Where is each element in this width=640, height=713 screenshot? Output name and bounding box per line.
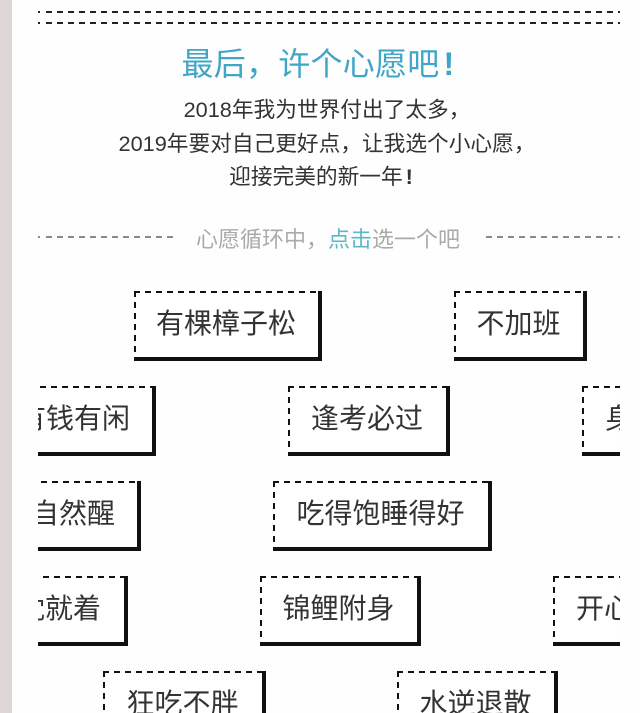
intro text: 2018年我为世界付出了太多， [184, 97, 470, 122]
tag: 吃得饱睡得好: 吃得饱睡得好 [296, 498, 464, 529]
tag: 开心就好 [553, 576, 640, 646]
tag: 有棵樟子松: 有棵樟子松 [156, 308, 296, 339]
tag: 睡到自然醒 [0, 481, 141, 551]
tag: 有棵樟子松 [134, 291, 322, 361]
tag: 身体健康 [582, 386, 640, 456]
left gray strip [0, 0, 12, 713]
prompt text: 心愿循环中，点击选一个吧 [196, 227, 460, 252]
second dashed rule [38, 22, 620, 24]
panel: scrolling wish tags [38, 291, 620, 713]
intro text [119, 97, 535, 189]
tag: 不加班 [454, 291, 587, 361]
tag: 逢考必过 [288, 386, 450, 456]
intro text: 迎接完美的新一年! [229, 164, 413, 189]
intro text: 2019年要对自己更好点，让我选个小心愿， [119, 130, 535, 156]
top dashed rule [38, 11, 620, 13]
tag: 逢考必过: 逢考必过 [311, 403, 423, 434]
tag: 锦鲤附身 [260, 576, 421, 646]
right divider [486, 236, 620, 238]
tag: 狂吃不胖 [103, 671, 266, 713]
left divider [38, 236, 173, 238]
tag: 水逆退散 [397, 671, 558, 713]
tag: 有钱有闲 [0, 386, 156, 456]
tag: 吃得饱睡得好 [273, 481, 492, 551]
tag: 锦鲤附身: 锦鲤附身 [282, 593, 394, 624]
title: 最后，许个心愿吧! [182, 46, 454, 82]
tag: 沾枕就着 [0, 576, 128, 646]
tag: 不加班: 不加班 [476, 308, 560, 339]
